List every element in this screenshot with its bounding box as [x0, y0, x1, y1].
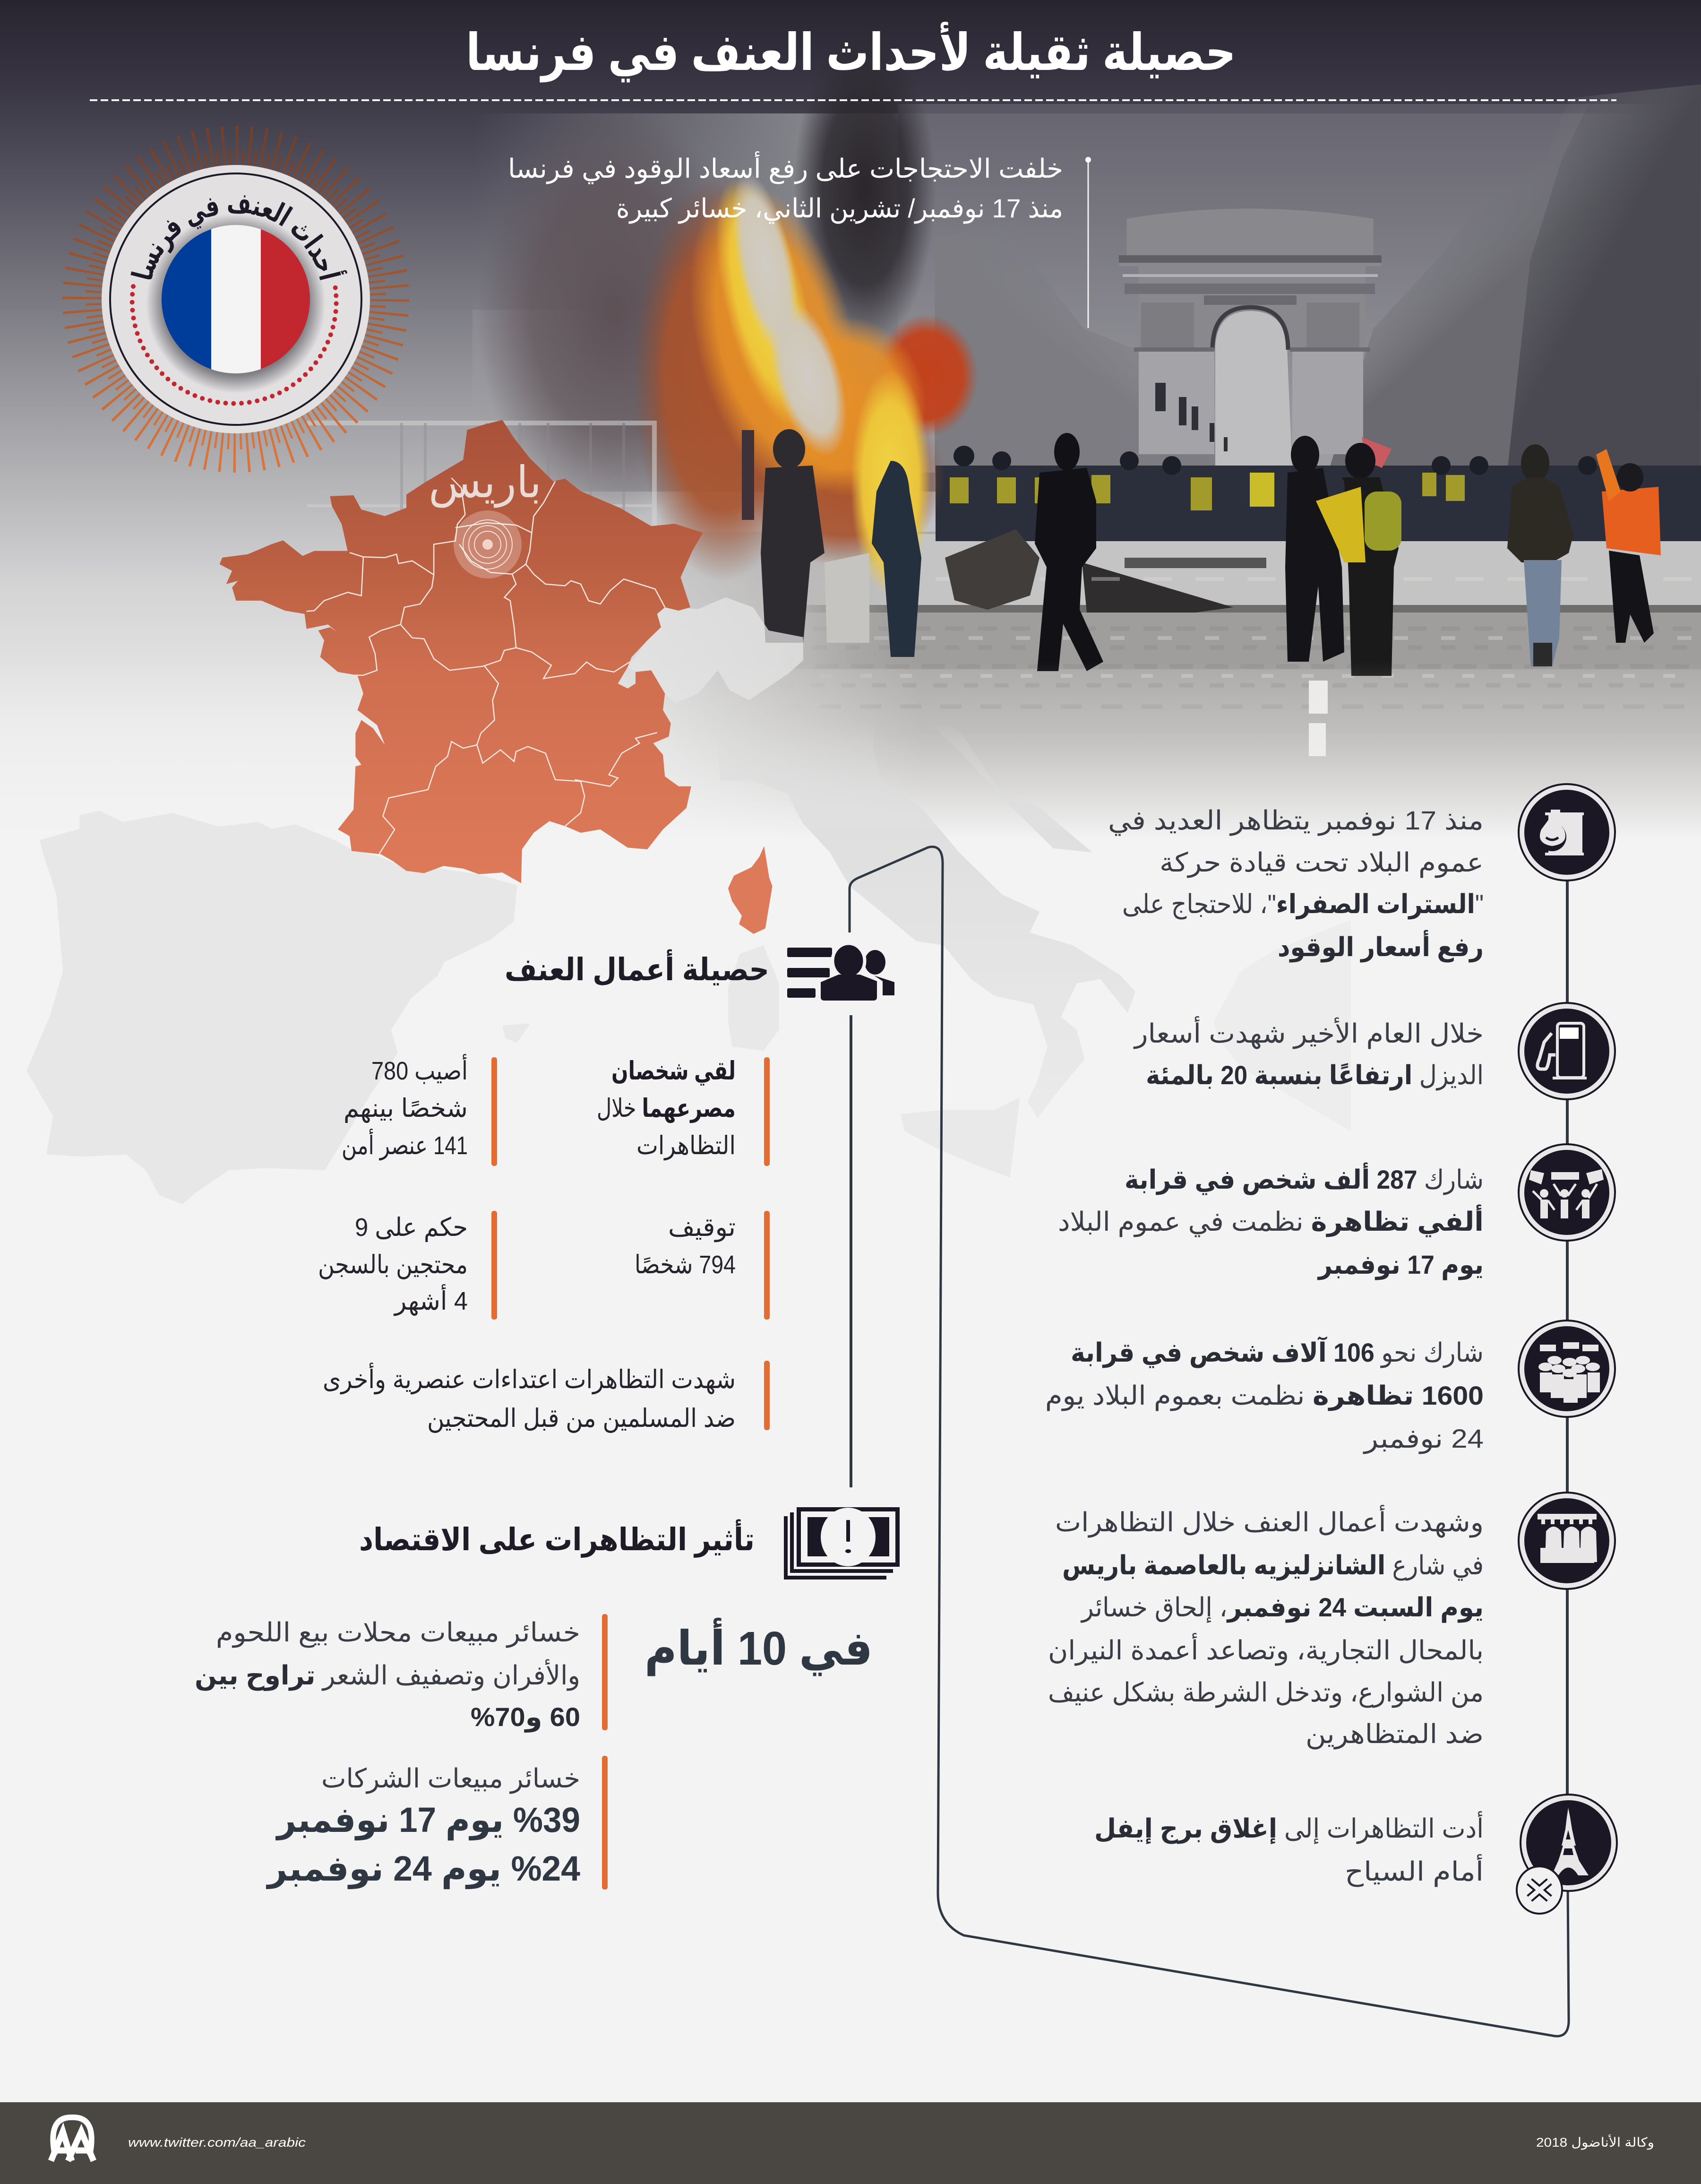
icon: banknotes warning	[784, 1507, 900, 1580]
block 5: من الشوارع، وتدخل الشرطة بشكل عنيف	[1048, 1677, 1484, 1708]
block 4: شارك نحو 106 آلاف شخص في قرابة	[1071, 1336, 1484, 1368]
credit: وكالة الأناضول 2018	[1536, 2134, 1654, 2150]
panel: violence toll items: ضد المسلمين من قبل المحتجين	[427, 1404, 736, 1433]
big label: in 10 days: في 10 أيام	[644, 1617, 873, 1676]
flag	[161, 222, 313, 378]
Italy	[716, 717, 1135, 1118]
icon: closed badge	[1517, 1866, 1562, 1914]
Germany and Switzerland overlay	[627, 597, 803, 703]
intro text: خلفت الاحتجاجات على رفع أسعاد الوقود في فرنسا	[508, 151, 1063, 184]
block 4: 1600 تظاهرة نظمت بعموم البلاد يوم	[1045, 1381, 1484, 1411]
map of France	[189, 402, 803, 945]
icon: crowd	[1518, 1320, 1616, 1418]
panel: violence toll items: لقي شخصان	[611, 1057, 736, 1086]
block 5: يوم السبت 24 نوفمبر، إلحاق خسائر	[1080, 1592, 1484, 1623]
panel: economic losses: خسائر مبيعات محلات بيع اللحوم	[216, 1617, 580, 1648]
panel: economic losses: %39 يوم 17 نوفمبر	[275, 1800, 580, 1841]
orange bars	[602, 1614, 608, 1890]
block 3: يوم 17 نوفمبر	[1317, 1250, 1484, 1280]
panel: violence toll items: أصيب 780	[371, 1054, 468, 1085]
block 5: بالمحال التجارية، وتصاعد أعمدة النيران	[1048, 1633, 1484, 1666]
badge: French flag seal	[62, 126, 409, 473]
Paris marker	[454, 510, 522, 578]
block 5: في شارع الشانزليزيه بالعاصمة باريس	[1062, 1550, 1484, 1581]
title and intro	[0, 0, 1701, 340]
timeline icons	[1488, 775, 1630, 1919]
Sicily	[901, 1097, 1020, 1177]
timeline connector outline	[803, 803, 1654, 2080]
block 2: الديزل ارتفاعًا بنسبة 20 بالمئة	[1146, 1060, 1484, 1091]
curved label: أحداث العنف في فرنسا	[126, 187, 348, 284]
block 6: أمام السياح	[1345, 1854, 1484, 1887]
title: حصيلة ثقيلة لأحداث العنف في فرنسا	[466, 22, 1236, 83]
label: Paris: باريس	[429, 458, 541, 508]
panel: violence toll items: محتجين بالسجن	[318, 1251, 468, 1279]
Balkans	[1214, 920, 1351, 1131]
panel: violence toll items: شهدت التظاهرات اعتداءات عنصرية وأخرى	[323, 1363, 736, 1394]
photo background: Champs-Elysees protest with fire and Arc de Triomphe	[0, 0, 1701, 851]
block 1	[1108, 805, 1484, 963]
footer bar	[0, 2102, 1701, 2184]
region borders	[307, 478, 665, 855]
panel: violence toll items: توقيف	[668, 1213, 736, 1242]
section: violence toll	[302, 936, 907, 1442]
logo	[51, 2117, 94, 2161]
panel: violence toll items: 4 أشهر	[393, 1284, 468, 1316]
Corsica	[709, 827, 803, 950]
intro text: منذ 17 نوفمبر/ تشرين الثاني، خسائر كبيرة	[616, 193, 1063, 224]
panel: violence toll items	[318, 1054, 770, 1433]
icon: protesters with signs	[1518, 1143, 1616, 1242]
panel: economic losses	[195, 1614, 608, 1890]
fire	[633, 165, 978, 596]
icon: fuel can	[1518, 783, 1616, 881]
block 3: ألفي تظاهرة نظمت في عموم البلاد	[1058, 1204, 1484, 1237]
panel: violence toll items: 794 شخصًا	[635, 1251, 736, 1279]
heading: economic impact: تأثير التظاهرات على الاقتصاد	[359, 1519, 755, 1558]
icon: Eiffel tower closed	[1517, 1794, 1618, 1914]
panel: violence toll items: شخصًا بينهم	[344, 1094, 468, 1123]
crowd with yellow vests	[936, 437, 1701, 541]
right column text: protest timeline	[1016, 794, 1488, 1900]
panel: economic losses: 60 و70%	[471, 1702, 580, 1733]
block 3: شارك 287 ألف شخص في قرابة	[1125, 1162, 1484, 1195]
block 4: 24 نوفمبر	[1363, 1424, 1484, 1454]
block 1: "السترات الصفراء"، للاحتجاج على	[1122, 889, 1484, 920]
block 6: أدت التظاهرات إلى إغلاق برج إيفل	[1094, 1811, 1484, 1845]
panel: violence toll items: التظاهرات	[636, 1131, 736, 1160]
mainland	[220, 420, 703, 883]
block 2	[1133, 1016, 1484, 1091]
panel: violence toll items: حكم على 9	[355, 1213, 468, 1242]
panel: violence toll items: 141 عنصر أمن	[342, 1129, 468, 1160]
orange bars	[491, 1057, 770, 1430]
block 5: وشهدت أعمال العنف خلال التظاهرات	[1055, 1505, 1484, 1538]
protesters	[742, 429, 1661, 676]
panel: violence toll items: مصرعهما خلال	[597, 1094, 736, 1123]
intro leader line	[1085, 157, 1091, 328]
dashed divider	[90, 99, 1616, 101]
smoke	[477, 28, 936, 520]
source url: www.twitter.com/aa_arabic	[128, 2135, 306, 2149]
Croatia coast	[928, 722, 1092, 853]
rays	[82, 146, 389, 453]
icon: violence toll people	[787, 943, 894, 1001]
fade into page at bottom	[0, 662, 1701, 839]
trees	[472, 85, 1701, 478]
panel: economic losses: خسائر مبيعات الشركات	[321, 1763, 580, 1794]
faint Europe map in background	[0, 662, 1701, 1276]
intro text	[508, 151, 1063, 224]
heading: violence toll: حصيلة أعمال العنف	[505, 949, 769, 987]
block 1: عموم البلاد تحت قيادة حركة	[1160, 847, 1484, 878]
arc de triomphe	[1119, 208, 1382, 473]
block 5	[1048, 1505, 1484, 1750]
block 4	[1045, 1336, 1484, 1454]
icon: riot police and crowd	[1518, 1492, 1616, 1590]
fence	[307, 423, 654, 633]
road	[591, 532, 1701, 839]
icon: fuel pump	[1518, 1002, 1616, 1100]
block 6	[1094, 1811, 1484, 1887]
section: economic impact	[180, 1498, 917, 1905]
block 5: ضد المتظاهرين	[1306, 1719, 1484, 1750]
Iberia	[26, 811, 517, 1204]
block 3	[1058, 1162, 1484, 1280]
block 1: منذ 17 نوفمبر يتظاهر العديد في	[1108, 805, 1484, 836]
block 2: خلال العام الأخير شهدت أسعار	[1133, 1016, 1484, 1049]
Sardinia	[728, 945, 779, 1051]
Balearic islands	[502, 1023, 530, 1043]
panel: economic losses: %24 يوم 24 نوفمبر	[266, 1849, 580, 1890]
panel: economic losses: والأفران وتصفيف الشعر تراوح بين	[195, 1659, 580, 1691]
